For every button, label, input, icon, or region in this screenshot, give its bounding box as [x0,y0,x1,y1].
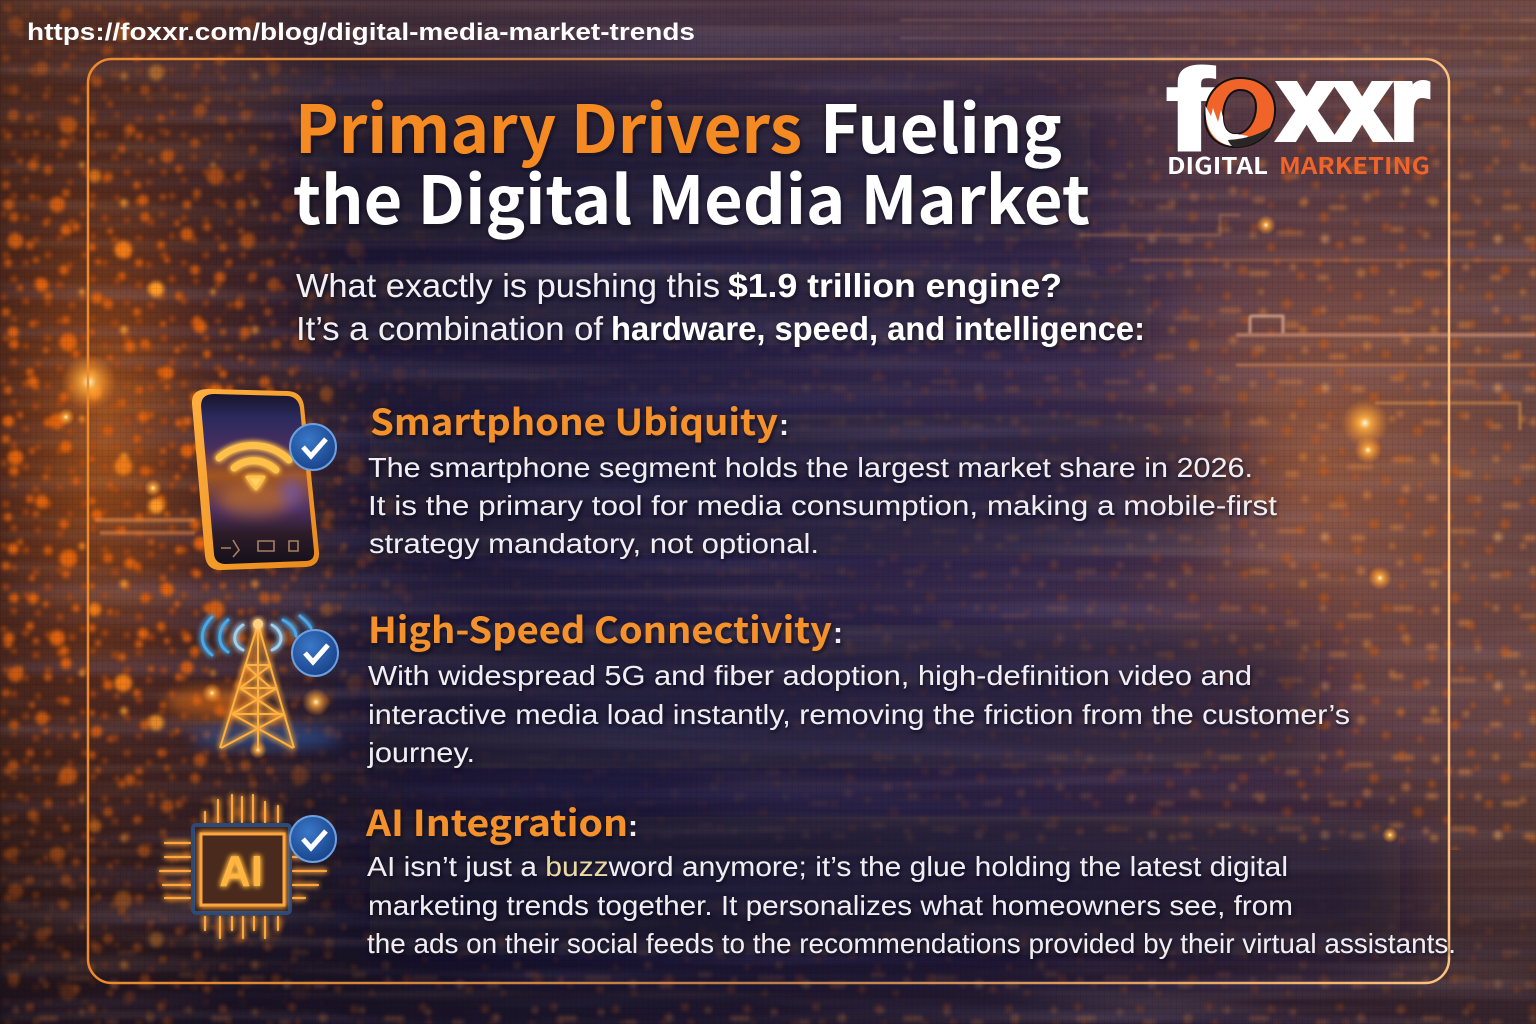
text: smartphone ubiquity: strategy mandatory, not optional. [369,528,819,559]
icon: check badge 3 [290,816,336,862]
icon: AI chip: AI [219,847,263,896]
text: smartphone ubiquity [368,452,1277,559]
heading: high-speed connectivity: High-Speed Connectivity [368,602,832,654]
heading: ai integration: AI Integration [365,795,628,847]
heading: high-speed connectivity: : [833,617,843,650]
url: https://foxxr.com/blog/digital-media-market-trends [27,19,695,46]
text: ai integration: the ads on their social feeds to the recommendations provided by their virtual assistants. [367,928,1456,959]
wifi symbol [219,445,289,489]
title: Fueling [820,77,1062,173]
text: high-speed connectivity [367,660,1350,768]
text: ai integration [367,851,1456,959]
heading: smartphone ubiquity: Smartphone Ubiquity [370,394,778,446]
text: smartphone ubiquity: The smartphone segment holds the largest market share in 2026. [368,452,1253,483]
frame [88,59,1449,983]
intro text: $1.9 trillion engine? [728,267,1062,304]
icon: check badge 1 [290,424,336,470]
logo: xxr [1279,46,1429,162]
icon: AI chip [160,795,326,938]
title: the Digital Media Market [293,148,1090,244]
text: ai integration: AI isn’t just a buzzword anymore; it’s the glue holding the latest digital [367,851,1288,882]
text: high-speed connectivity: With widespread 5G and fiber adoption, high-definition video and [368,660,1252,691]
text: high-speed connectivity: journey. [367,737,475,768]
heading: ai integration: : [628,810,638,843]
intro text [296,267,1145,347]
text: ai integration: marketing trends together. It personalizes what homeowners see, from [368,890,1293,921]
text: high-speed connectivity: interactive media load instantly, removing the friction from the customer’s [368,699,1350,730]
logo [1166,45,1430,181]
intro text: hardware, speed, and intelligence: [611,310,1145,347]
title: Primary Drivers [295,77,802,173]
icon: 5G tower [165,616,340,759]
intro text: It’s a combination of [296,310,604,347]
logo fox-tail o [1205,78,1275,147]
logo: DIGITAL [1167,147,1268,181]
logo: f [1166,45,1214,175]
icon: smartphone with wifi [192,389,319,570]
logo: MARKETING [1279,147,1430,181]
heading: smartphone ubiquity: : [779,409,789,442]
icon: check badge 2 [292,630,338,676]
title [293,77,1090,244]
intro text: What exactly is pushing this [296,267,720,304]
text: smartphone ubiquity: It is the primary tool for media consumption, making a mobile-first [368,490,1277,521]
